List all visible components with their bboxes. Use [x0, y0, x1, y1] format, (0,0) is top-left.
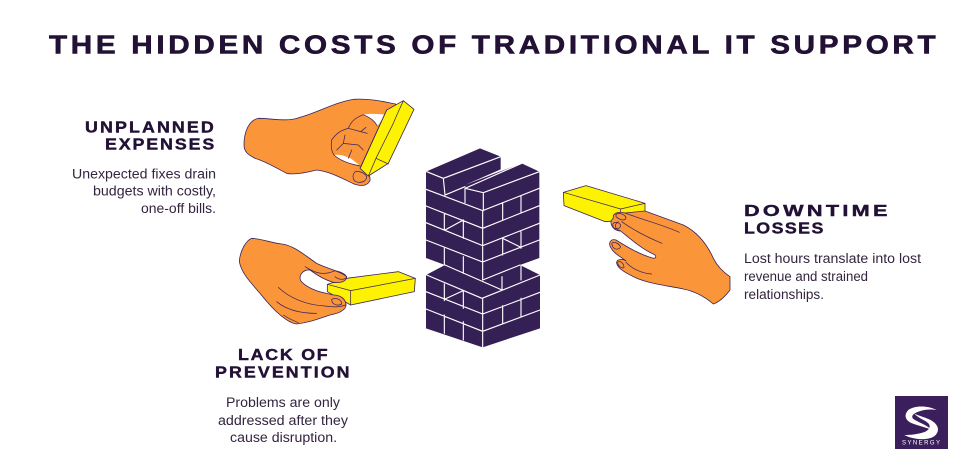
panel: unplanned expenses text: Unexpected fixes drain [72, 167, 216, 182]
panel: lack of prevention text: PREVENTION [215, 364, 350, 381]
icon: block tower [426, 148, 540, 347]
panel: downtime losses text: Lost hours translate into lost [744, 251, 921, 266]
panel: unplanned expenses text: one-off bills. [141, 201, 216, 216]
panel: downtime losses text: DOWNTIME [744, 202, 888, 219]
panel: downtime losses text [744, 202, 921, 302]
panel: unplanned expenses text: UNPLANNED [85, 119, 214, 136]
panel: lack of prevention text [215, 346, 350, 445]
icon: S swoosh [904, 406, 938, 439]
logo wordmark: SYNERGY [902, 440, 940, 446]
panel: lack of prevention text: addressed after they [218, 413, 348, 428]
icon: Synergy logo [895, 396, 948, 449]
panel: lack of prevention text: Problems are only [226, 395, 340, 410]
icon: right hand pulling block [563, 186, 730, 304]
panel: downtime losses text: revenue and strained [744, 269, 868, 284]
panel: unplanned expenses text [72, 119, 216, 216]
panel: downtime losses text: relationships. [744, 287, 824, 302]
icon: left hand holding block [239, 238, 415, 324]
panel: unplanned expenses text: EXPENSES [105, 136, 214, 153]
panel: downtime losses text: LOSSES [744, 220, 823, 237]
panel: lack of prevention text: cause disruption. [230, 430, 337, 445]
icon: top hand holding block [244, 99, 414, 185]
panel: lack of prevention text: LACK OF [238, 346, 328, 364]
title: THE HIDDEN COSTS OF TRADITIONAL IT SUPPORT [49, 30, 936, 59]
panel: unplanned expenses text: budgets with costly, [93, 184, 216, 198]
